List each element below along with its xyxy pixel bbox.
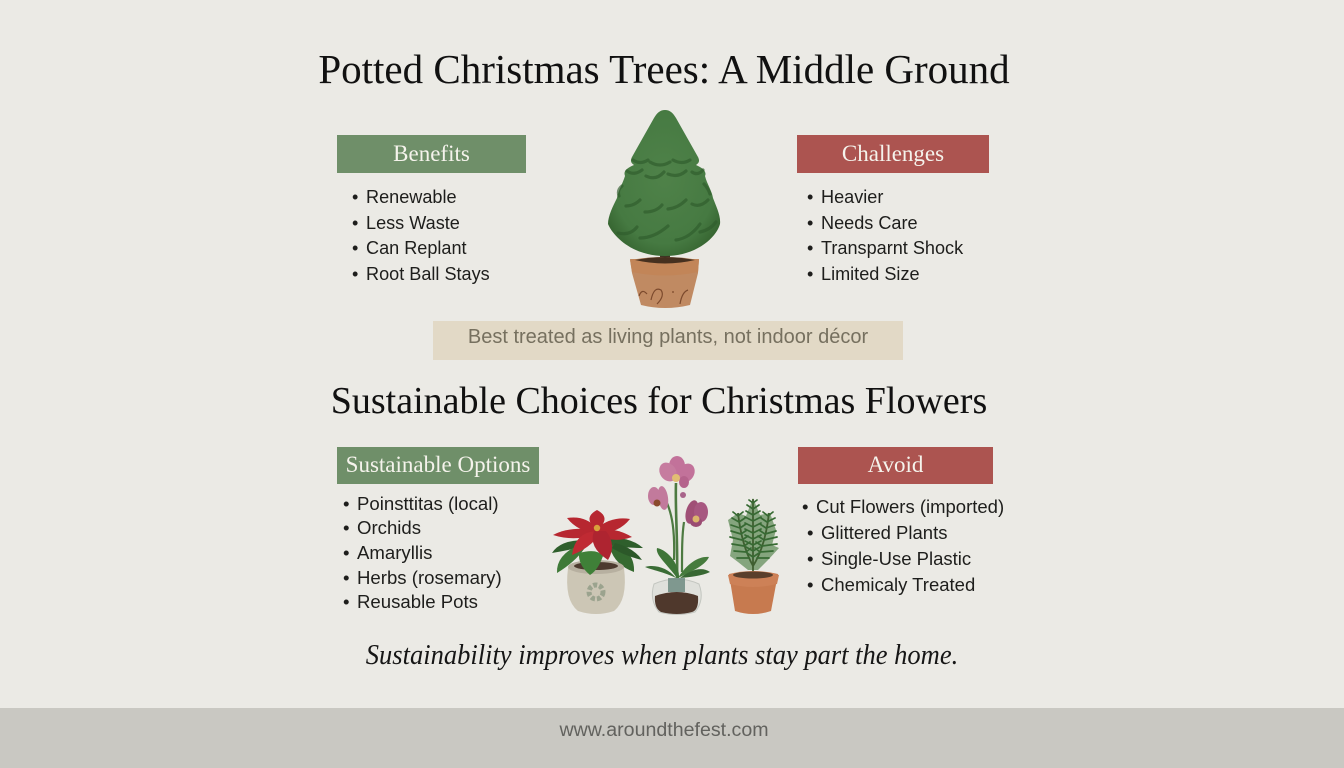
footer bar: www.aroundthefest.com bbox=[559, 719, 769, 741]
list: sustainable options: Orchids bbox=[357, 517, 421, 538]
heading: challenges: Challenges bbox=[842, 141, 944, 166]
list: avoid: • bbox=[807, 548, 813, 569]
list: challenges: Limited Size bbox=[821, 264, 920, 284]
heading: benefits bbox=[337, 135, 526, 173]
list: benefits: Renewable bbox=[366, 187, 457, 207]
list: sustainable options: Poinsttitas (local) bbox=[357, 493, 499, 514]
list: avoid bbox=[802, 496, 1004, 595]
list: benefits: Less Waste bbox=[366, 213, 460, 233]
heading: sustainable options: Sustainable Options bbox=[346, 452, 530, 477]
list: avoid: • bbox=[807, 574, 813, 595]
title: christmas flowers: Sustainable Choices for Christmas Flowers bbox=[331, 380, 987, 422]
list: sustainable options: • bbox=[343, 493, 350, 514]
list: avoid: Single-Use Plastic bbox=[821, 548, 971, 569]
callout: living plants note: Best treated as living plants, not indoor décor bbox=[468, 326, 868, 348]
list: avoid: Chemicaly Treated bbox=[821, 574, 975, 595]
list: sustainable options: • bbox=[343, 517, 350, 538]
heading: challenges bbox=[797, 135, 989, 173]
title: potted trees: Potted Christmas Trees: A Middle Ground bbox=[318, 46, 1010, 92]
footer bar bbox=[0, 708, 1344, 768]
list: sustainable options bbox=[343, 493, 502, 612]
list: challenges: • bbox=[807, 187, 813, 207]
callout: living plants note bbox=[433, 321, 903, 360]
list: avoid: Cut Flowers (imported) bbox=[816, 496, 1004, 517]
list: sustainable options: Herbs (rosemary) bbox=[357, 567, 502, 588]
heading: avoid bbox=[798, 447, 993, 484]
list: challenges: • bbox=[807, 213, 813, 233]
list: benefits: • bbox=[352, 238, 358, 258]
list: benefits: Root Ball Stays bbox=[366, 264, 490, 284]
heading: benefits: Benefits bbox=[393, 141, 470, 166]
list: challenges bbox=[807, 187, 964, 284]
list: benefits: Can Replant bbox=[366, 238, 467, 258]
list: challenges: Transparnt Shock bbox=[821, 238, 963, 258]
list: benefits: • bbox=[352, 213, 358, 233]
closing statement: Sustainability improves when plants stay part the home. bbox=[366, 639, 958, 671]
heading: avoid: Avoid bbox=[868, 452, 923, 477]
heading: sustainable options bbox=[337, 447, 539, 484]
list: sustainable options: • bbox=[343, 542, 350, 563]
list: sustainable options: Amaryllis bbox=[357, 542, 432, 563]
list: benefits: • bbox=[352, 187, 358, 207]
list: challenges: • bbox=[807, 264, 813, 284]
list: sustainable options: • bbox=[343, 591, 350, 612]
list: avoid: • bbox=[802, 496, 808, 517]
list: benefits bbox=[352, 187, 490, 284]
list: challenges: Needs Care bbox=[821, 213, 918, 233]
list: avoid: Glittered Plants bbox=[821, 522, 947, 543]
list: challenges: • bbox=[807, 238, 813, 258]
list: challenges: Heavier bbox=[821, 187, 883, 207]
list: sustainable options: • bbox=[343, 567, 350, 588]
list: benefits: • bbox=[352, 264, 358, 284]
list: sustainable options: Reusable Pots bbox=[357, 591, 478, 612]
list: avoid: • bbox=[807, 522, 813, 543]
